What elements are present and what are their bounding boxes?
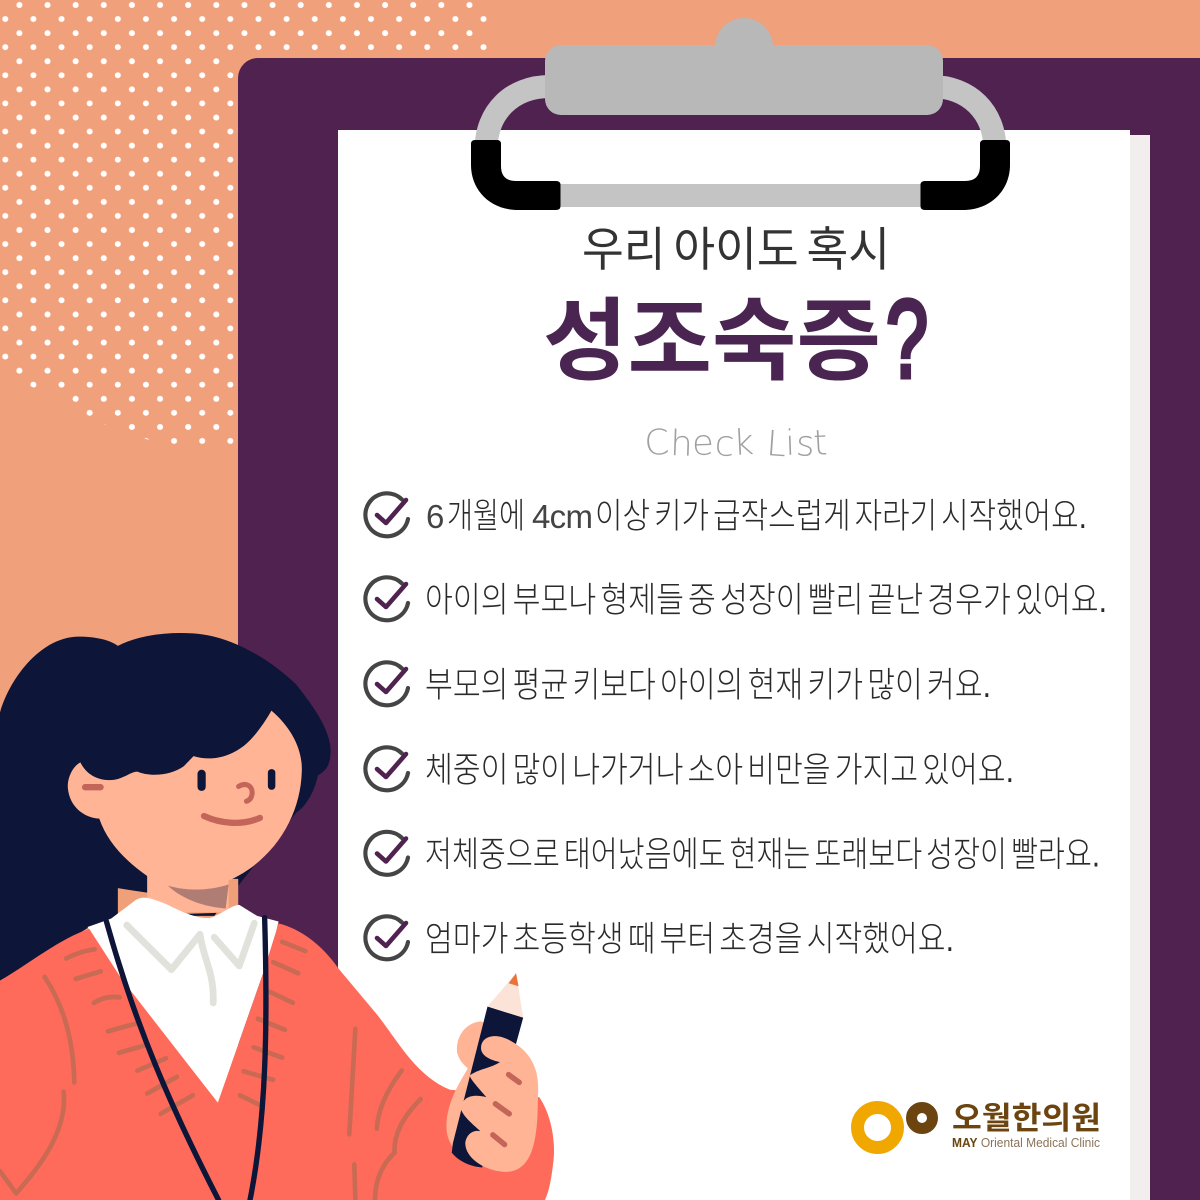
check item 4: 체중이 많이 나가거나 소아 비만을 가지고 있어요. (425, 751, 1014, 790)
check item 1: 개월에 (447, 497, 525, 536)
white shirt (87, 898, 279, 1103)
clip lower bar (555, 184, 927, 207)
lanyard (106, 918, 266, 1200)
pencil body (452, 1007, 523, 1167)
check item 1: 이상 키가 급작스럽게 자라기 시작했어요. (595, 497, 1087, 536)
check item 1: 6 (426, 498, 444, 535)
hand palm (446, 1021, 536, 1167)
subtitle: 우리 아이도 혹시 (582, 223, 890, 276)
face (68, 711, 302, 887)
main title (543, 278, 928, 401)
clip left grip (471, 140, 560, 210)
hair (0, 633, 331, 981)
logo yellow ring (858, 1108, 898, 1148)
character illustration (0, 633, 554, 1200)
right eye (268, 769, 275, 790)
coral cardigan (0, 923, 554, 1200)
collar lines (127, 923, 254, 1003)
logo korean name: 오월한의원 (952, 1101, 1101, 1136)
mouth (204, 816, 260, 823)
check item 3: 부모의 평균 키보다 아이의 현재 키가 많이 커요. (425, 666, 991, 705)
logo english name: MAY Oriental Medical Clinic (952, 1135, 1100, 1150)
nose (239, 785, 252, 801)
fingers (461, 1036, 538, 1172)
clip wire (486, 86, 995, 150)
check item 6: 엄마가 초등학생 때 부터 초경을 시작했어요. (425, 920, 954, 959)
pencil wood tip (487, 973, 523, 1018)
neck shadow (168, 884, 229, 909)
clip knob (715, 18, 773, 76)
check list label: Check List (643, 423, 828, 465)
cardigan creases (0, 977, 421, 1200)
check item 1 (365, 493, 1087, 536)
logo brown ring (912, 1108, 932, 1128)
pencil lead (509, 973, 519, 986)
clinic logo (858, 1101, 1101, 1150)
clipboard board (238, 58, 1200, 1200)
check item 2: 아이의 부모나 형제들 중 성장이 빨리 끝난 경우가 있어요. (425, 581, 1107, 620)
clip right grip (920, 140, 1010, 210)
dot pattern (0, 0, 490, 447)
pencil (452, 973, 523, 1167)
clipboard clip (471, 18, 1010, 210)
ear mark (85, 779, 101, 796)
check item 1: 4cm (532, 498, 593, 535)
neck (147, 872, 229, 912)
left eye (197, 770, 206, 791)
main title: 성조숙증 (543, 292, 881, 392)
clip plate (545, 45, 943, 115)
checklist (365, 493, 1107, 959)
back paper sheet (1100, 135, 1150, 1200)
cardigan ribbing (66, 942, 305, 1114)
fingernails (493, 1075, 519, 1145)
main title: ? (886, 278, 928, 401)
neck shade back (118, 879, 238, 916)
front paper sheet (338, 130, 1130, 1200)
